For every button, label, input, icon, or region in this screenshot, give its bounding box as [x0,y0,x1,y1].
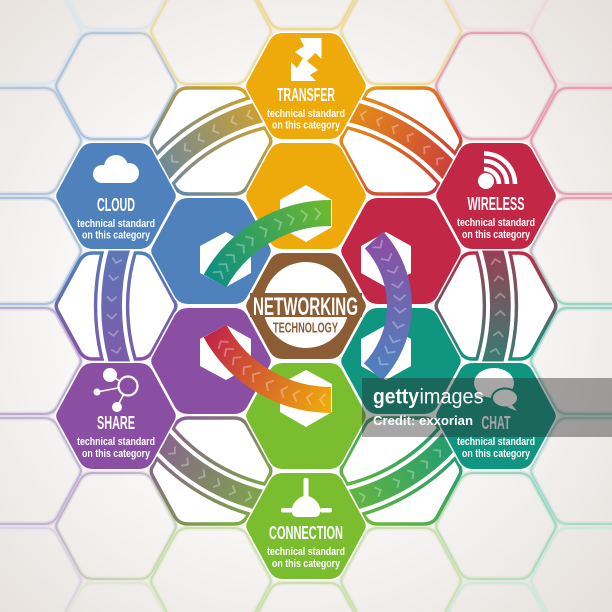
panel: cloud [56,143,176,249]
icon: transfer arrows [291,38,322,81]
panel: connection [246,473,366,579]
inner white hexagon windows [200,185,411,427]
ring white gap [112,106,500,506]
centre title hexagon: NETWORKING [253,293,358,321]
centre title hexagon [246,253,366,359]
panel: share [56,363,176,469]
panel: chat [436,363,556,469]
panel: connection: on this category [272,558,341,570]
panel: share: technical standard [77,436,155,448]
panel: wireless: technical standard [457,217,535,229]
ring arrow band [112,106,500,506]
panel: wireless [436,143,556,249]
watermark: images [420,386,484,408]
watermark [362,378,612,437]
panel: connection: technical standard [267,546,345,558]
watermark: getty [373,386,419,408]
inner coloured hexagons [151,143,461,469]
ribbon: green to teal [213,207,331,281]
panel: chat: on this category [462,448,531,460]
panel: wireless: WIRELESS [468,194,524,214]
ring background hexagons [56,88,556,524]
panel: cloud: CLOUD [97,195,135,215]
panel: share: on this category [82,448,151,460]
icon: wifi signal [478,154,515,189]
ring chevrons [107,110,505,502]
panel: chat: technical standard [457,436,535,448]
panel: transfer: TRANSFER [277,85,335,105]
icon: network connector [281,478,332,517]
panel: transfer: on this category [272,120,341,132]
panel: chat: CHAT [482,413,511,433]
panel: share: SHARE [97,413,135,433]
centre title hexagon: TECHNOLOGY [273,320,338,336]
ring arc outlines inside hexagons [112,106,500,506]
watermark: Credit: exxorian [373,413,473,428]
panel: transfer [246,33,366,139]
ribbon: purple to blue [373,240,406,372]
panel: connection: CONNECTION [269,523,343,543]
panel: cloud: technical standard [77,218,155,230]
ribbon: orange to red [215,331,331,406]
panel: cloud: on this category [82,230,151,242]
panel: transfer: technical standard [267,108,345,120]
icon: share nodes [94,368,138,412]
icon: cloud [93,155,139,183]
icon: chat bubbles [474,368,518,411]
panel: wireless: on this category [462,229,531,241]
